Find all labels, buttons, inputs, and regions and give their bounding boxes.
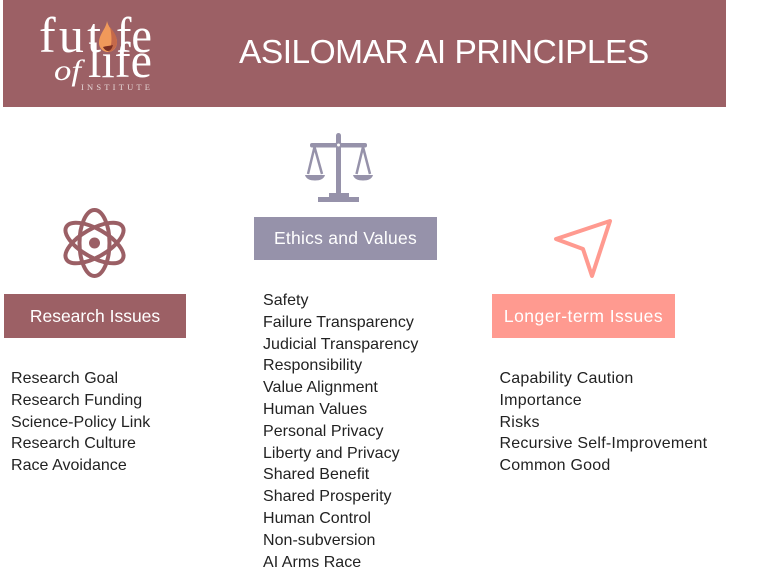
list: ethics and values: Shared Prosperity	[263, 488, 392, 505]
list: ethics and values: Safety	[263, 292, 309, 309]
list: ethics and values: Judicial Transparency	[263, 336, 418, 353]
list: research issues: Race Avoidance	[11, 457, 127, 474]
list: ethics and values: Personal Privacy	[263, 423, 384, 440]
logo: Future of Life Institute: fut	[39, 8, 101, 63]
icon: navigation arrow	[554, 219, 612, 278]
list: longer-term issues	[500, 370, 707, 474]
list: ethics and values: AI Arms Race	[263, 554, 361, 571]
title: ASILOMAR AI PRINCIPLES	[239, 34, 649, 71]
list: ethics and values: Liberty and Privacy	[263, 445, 400, 462]
heading: Ethics and Values	[254, 217, 437, 260]
heading: Research Issues: Research Issues	[30, 306, 160, 326]
list: ethics and values: Failure Transparency	[263, 314, 414, 331]
list: ethics and values	[263, 292, 418, 571]
logo: Future of Life Institute: of	[54, 54, 85, 87]
header banner	[3, 0, 726, 107]
icon: scales	[305, 133, 373, 202]
list: ethics and values: Human Control	[263, 510, 371, 527]
logo: Future of Life Institute: life	[88, 32, 152, 88]
list: ethics and values: Non-subversion	[263, 532, 375, 549]
heading: Longer-term Issues	[492, 294, 675, 338]
list: longer-term issues: Recursive Self-Improvement	[500, 435, 707, 452]
list: research issues: Research Goal	[11, 370, 118, 387]
logo: Future of Life Institute: fe	[116, 8, 152, 63]
list: longer-term issues: Common Good	[500, 457, 611, 474]
list: ethics and values: Responsibility	[263, 357, 362, 374]
list: research issues	[11, 370, 150, 474]
heading: Ethics and Values: Ethics and Values	[274, 228, 417, 248]
list: research issues: Research Funding	[11, 392, 142, 409]
list: research issues: Research Culture	[11, 435, 136, 452]
heading: Longer-term Issues: Longer-term Issues	[504, 306, 663, 326]
list: ethics and values: Shared Benefit	[263, 466, 369, 483]
list: research issues: Science-Policy Link	[11, 414, 150, 431]
list: ethics and values: Value Alignment	[263, 379, 378, 396]
logo: Future of Life Institute: INSTITUTE	[81, 82, 150, 92]
list: longer-term issues: Capability Caution	[500, 370, 634, 387]
list: longer-term issues: Importance	[500, 392, 582, 409]
icon: atom	[63, 208, 126, 278]
list: ethics and values: Human Values	[263, 401, 367, 418]
list: longer-term issues: Risks	[500, 414, 540, 431]
heading: Research Issues	[4, 294, 186, 338]
logo: Future of Life Institute	[39, 8, 152, 92]
